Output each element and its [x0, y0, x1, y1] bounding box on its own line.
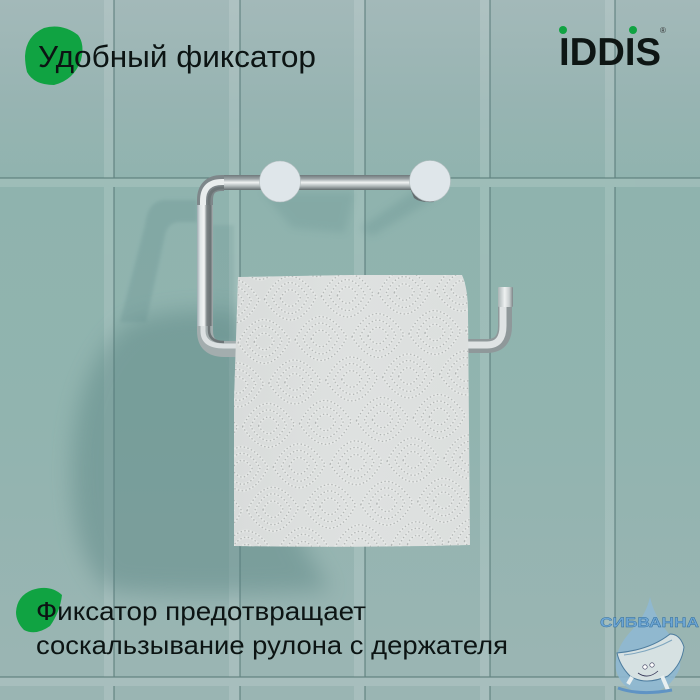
paper roll [234, 275, 470, 547]
holder: right arm [468, 300, 505, 346]
logo: wordmark: IDDIS [559, 31, 661, 74]
holder: left mounting disc [260, 161, 300, 202]
logo: registered mark: ® [660, 26, 666, 35]
shadow of the roll and holder [72, 192, 446, 594]
caption [16, 588, 508, 660]
logo: IDDIS [559, 26, 666, 74]
logo: green dots [559, 26, 637, 34]
watermark: Сибванна [600, 597, 699, 693]
title [25, 27, 316, 85]
caption: text: соскальзывание рулона с держателя [36, 630, 508, 660]
holder: upper corner [203, 182, 224, 212]
holder: top rail [222, 175, 412, 190]
toilet paper holder [197, 160, 513, 349]
caption: green accent blob [16, 588, 62, 632]
watermark: wordmark: СИБВАННА [600, 614, 699, 630]
holder: lower corner [203, 326, 236, 349]
title: green accent blob [25, 27, 82, 85]
holder: vertical rail [197, 205, 213, 329]
caption: text: Фиксатор предотвращает [36, 596, 366, 626]
title: text: Удобный фиксатор [38, 39, 316, 74]
holder: right mounting disc [410, 160, 450, 202]
watermark: water drop [616, 597, 680, 693]
watermark: bathtub [617, 634, 684, 693]
